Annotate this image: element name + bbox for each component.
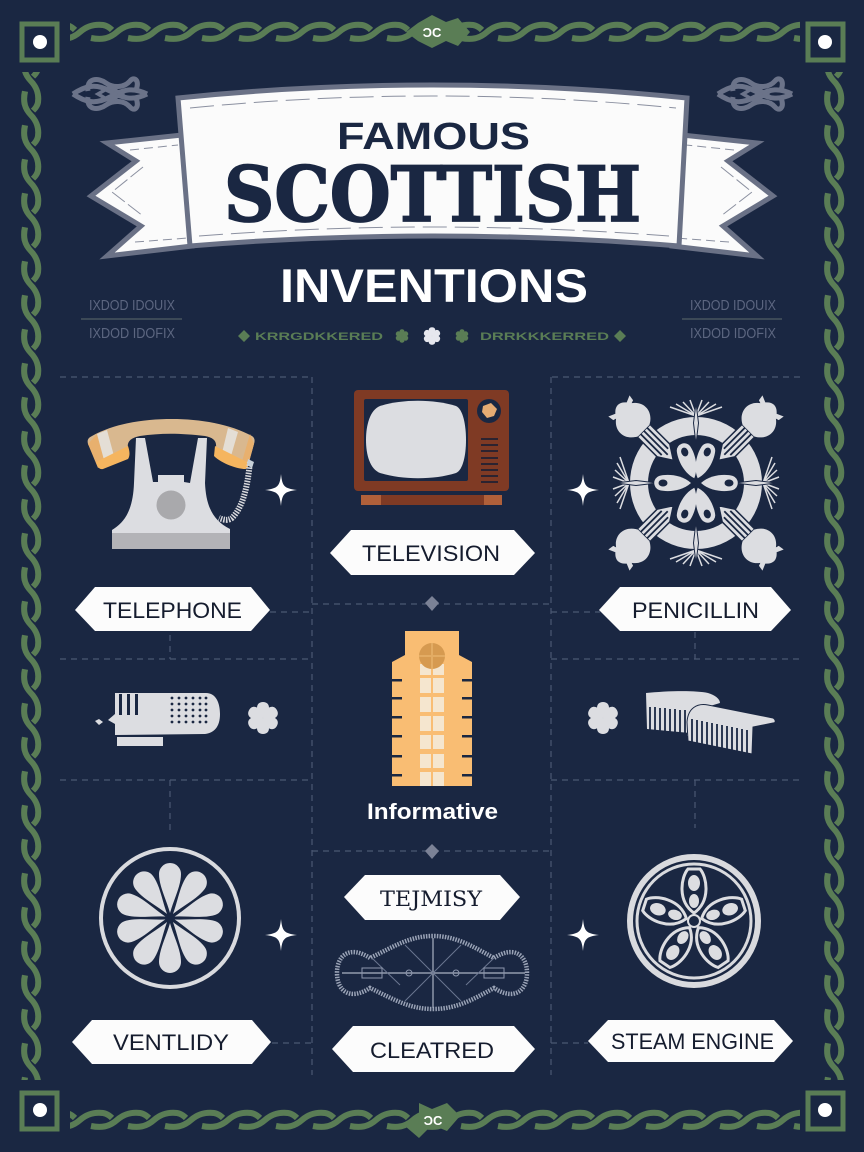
side note: left: IXDOD IDOUIX — [89, 297, 175, 314]
icon: steam engine wheel — [630, 857, 758, 985]
icon: blueprint diagram — [337, 936, 527, 1009]
icon: sparkle left of centre — [265, 474, 297, 506]
corner: bottom right — [808, 1093, 843, 1129]
label: penicillin — [599, 587, 791, 631]
label: steam engine: STEAM ENGINE — [611, 1029, 774, 1054]
label: cleatred — [332, 1026, 535, 1072]
border: top braid — [70, 15, 800, 48]
icon: projector — [95, 693, 220, 746]
border: bottom braid: ƆC — [424, 1113, 443, 1128]
icon: telephone — [88, 419, 255, 549]
label: penicillin: PENICILLIN — [632, 598, 759, 623]
icon: comb — [646, 691, 775, 754]
label: ventlidy — [72, 1020, 271, 1064]
icon: sparkle lower left — [265, 919, 297, 951]
label: ventlidy: VENTLIDY — [113, 1030, 229, 1055]
node: lower diamond — [425, 844, 439, 859]
ribbon left tail — [91, 135, 192, 256]
label: cleatred: CLEATRED — [370, 1038, 494, 1063]
icon: sparkle lower right — [567, 919, 599, 951]
decorative subtitle row — [238, 327, 626, 345]
label: steam engine — [588, 1020, 793, 1062]
label: television: TELEVISION — [362, 541, 500, 566]
side note: right — [682, 297, 782, 342]
label: television — [330, 530, 535, 575]
border: right braid — [822, 72, 846, 1080]
label: telephone: TELEPHONE — [103, 598, 242, 623]
corner: top left — [22, 24, 57, 60]
icon: sparkle right of centre — [567, 474, 599, 506]
caption: informative: Informative — [367, 799, 498, 824]
node: upper diamond — [425, 596, 439, 611]
icon: penicillin — [605, 392, 787, 574]
border: left braid — [19, 72, 43, 1080]
icon: flower right — [586, 702, 620, 734]
ribbon right tail — [672, 135, 773, 256]
icon: tower — [392, 631, 472, 786]
ornament: right knot — [718, 79, 792, 109]
border: bottom braid — [70, 1103, 800, 1138]
icon: ventilator wheel — [101, 849, 239, 987]
icon: television — [354, 390, 509, 505]
title banner — [91, 85, 773, 256]
ornament: left knot — [73, 79, 147, 109]
decorative subtitle row: KRRGDKKERED — [255, 331, 383, 343]
side note: left: IXDOD IDOFIX — [89, 325, 175, 342]
side note: left — [81, 297, 182, 342]
border: top braid: ƆC — [423, 25, 442, 40]
ribbon main panel — [178, 85, 687, 246]
title line: SCOTTISH: SCOTTISH — [224, 150, 641, 239]
corner: top right — [808, 24, 843, 60]
icon: flower left — [246, 702, 280, 734]
title line: INVENTIONS: INVENTIONS — [280, 259, 588, 312]
decorative subtitle row: DRRKKKERRED — [480, 331, 609, 343]
side note: right: IXDOD IDOUIX — [690, 297, 776, 314]
corner: bottom left — [22, 1093, 57, 1129]
title line: FAMOUS: FAMOUS — [337, 116, 530, 158]
label: telephone — [75, 587, 270, 631]
label: tejmisy: TEJMISY — [380, 887, 483, 911]
side note: right: IXDOD IDOFIX — [690, 325, 776, 342]
label: tejmisy — [344, 875, 520, 920]
